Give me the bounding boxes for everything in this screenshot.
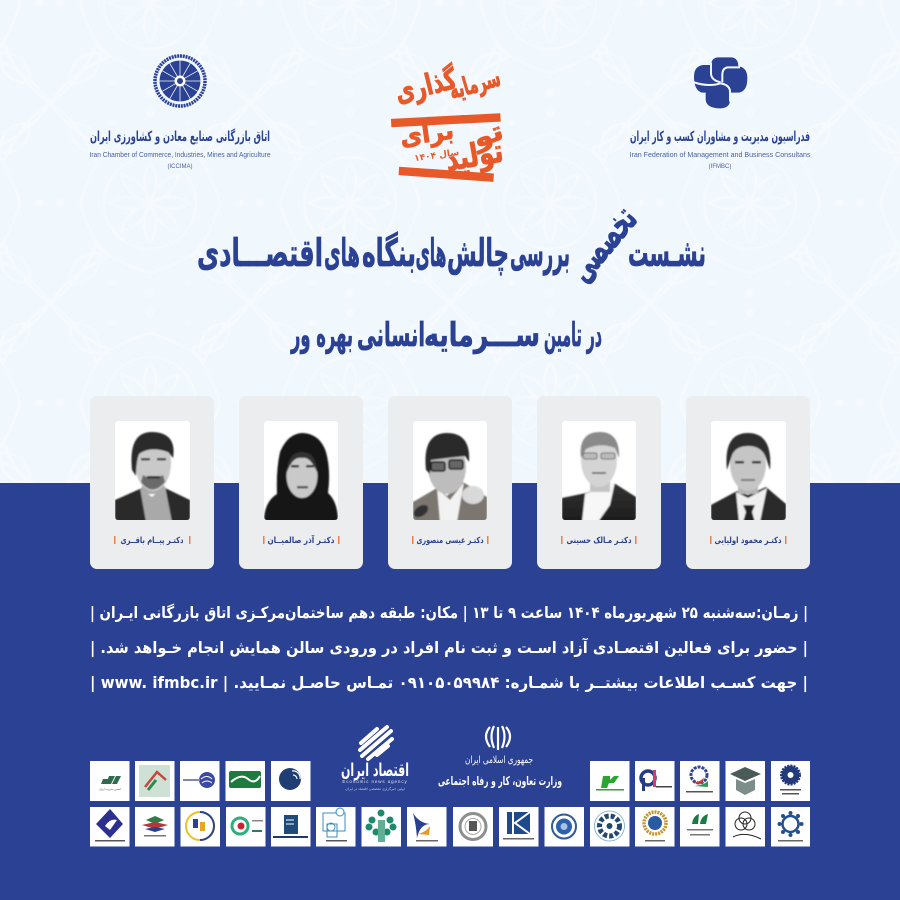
campaign slogan calligraphy — [388, 61, 507, 196]
title line 1: نشـست — [628, 231, 706, 275]
icon: striped globe — [360, 727, 392, 759]
tile: green arrow logo — [590, 761, 630, 801]
name 1 right bar — [189, 536, 190, 544]
portrait 2 — [264, 421, 338, 522]
slogan word: capital: سرمایه — [446, 63, 504, 106]
name 3 left bar — [412, 536, 414, 544]
slogan word: production: تولید — [442, 131, 506, 179]
chamber Persian name: اتاق بازرگانی صنایع معادن و کشاورزی ایران — [90, 128, 270, 145]
tile: graduation cap logo — [726, 761, 765, 801]
slogan swash lower: ـــ — [398, 120, 498, 196]
event details text — [90, 603, 808, 693]
partner logos row 2 — [90, 807, 810, 846]
name 2 right bar — [338, 536, 340, 544]
federation abbreviation: (IFMBC) — [709, 164, 731, 170]
main title — [197, 197, 706, 355]
slogan swash: ـــ — [388, 66, 502, 142]
tile: blue dotted ring — [771, 807, 810, 846]
title line 2: ســـرمایه — [424, 315, 540, 355]
portrait 5 — [711, 421, 786, 522]
tile: green leaves — [680, 807, 720, 846]
title line 1 — [197, 197, 706, 290]
icon: federation emblem — [693, 57, 747, 108]
name 5 left bar — [710, 536, 712, 544]
logo: Economic news agency — [341, 727, 409, 791]
tile: blue globe circle — [180, 761, 220, 801]
speaker card 3: Isa Mansouri — [388, 396, 512, 569]
portrait 3 — [412, 421, 487, 522]
name 3 right bar — [487, 536, 488, 544]
name 4 right bar — [635, 536, 636, 544]
name 2: دکتـر آذر صالمیــان — [268, 534, 335, 546]
tile: house chart logo — [135, 761, 174, 801]
name 4 left bar — [561, 536, 562, 544]
name 5: دکتـر محمود اولیایی — [714, 536, 782, 546]
agency English name: Economic news agency — [342, 779, 408, 784]
tile: green circle with red flower — [226, 807, 266, 846]
tile: development association logo — [680, 761, 720, 801]
tile: green NCR logo — [90, 761, 130, 801]
partner logos row 1 right — [590, 761, 810, 801]
icon: Iran emblem — [486, 726, 510, 750]
federation English name: Iran Federation of Management and Business Consultans — [630, 150, 811, 159]
title line 2: بهره ور — [290, 315, 353, 355]
title line 2: انسانی — [357, 315, 425, 354]
tile: chamber emblem — [771, 761, 810, 801]
name 1 left bar — [114, 536, 116, 544]
tile: gold and blue medallion — [635, 807, 674, 846]
title line 1: اقتصـــادی — [197, 231, 323, 275]
detail line: attendance: | حضور برای فعالین اقتصـادی آزاد اسـت و ثبت نام افراد در ورودی سالن همایش انجام خـواهد شد. | — [90, 637, 808, 658]
speaker card 4: Malek Hosseini — [537, 396, 661, 569]
chamber abbreviation: (ICCIMA) — [168, 164, 192, 170]
patterned light background — [0, 0, 900, 484]
chamber English name: Iran Chamber of Commerce, Industries, Mines and Agriculture — [90, 150, 270, 159]
title line 1: تخصصی — [558, 197, 646, 290]
logo: Iran Federation of Management and Business Consultants — [630, 57, 811, 170]
tile: blue cog with ring — [590, 807, 630, 846]
tile: black line knot — [726, 807, 765, 846]
portrait 4 — [562, 421, 636, 522]
title line 1: چالش — [447, 231, 509, 275]
detail line: time and place: | زمـان:سه‌شنبه ۲۵ شهریورماه ۱۴۰۴ ساعت ۹ تا ۱۳ | مکان: طبقه دهم ساختمان‌مرکـزی اتاق بازرگانی ایـران | — [90, 603, 808, 623]
name 4: دکتـر مـالک حسینی — [566, 536, 632, 546]
slogan word: for: برای — [398, 115, 456, 153]
tile: layered colours — [135, 807, 174, 846]
slogan word: investment: گذاری — [391, 61, 460, 109]
tile: green banner — [226, 761, 265, 801]
logo: Iran Chamber of Commerce — [90, 56, 270, 170]
title line 1: بررسی — [510, 231, 570, 275]
logo: Ministry of Cooperatives, Labour and Social Welfare — [438, 726, 562, 789]
tile: blue columns — [271, 807, 310, 846]
partner logos row 1 left — [90, 761, 310, 801]
tile: blue P logo — [635, 761, 674, 801]
name 3: دکتـر عیسی منصوری — [416, 536, 484, 546]
agency Persian name: اقتصاد ایران — [341, 760, 409, 781]
tile: connected squares — [316, 807, 356, 846]
tile: blue diamond — [90, 807, 130, 846]
slogan year: سال ۱۴۰۴ — [414, 148, 460, 164]
tile: blue orange swoosh — [407, 807, 446, 846]
main title: در تامین — [544, 315, 602, 355]
tile: green NCR logo: انجمن مدیریت ایران — [99, 788, 121, 791]
speaker card 5: Mahmoud Owliaei — [686, 396, 810, 569]
tile: green ornament — [362, 807, 401, 846]
slogan word stack: to: تو — [467, 116, 507, 155]
title line 1: بنگاه — [362, 231, 416, 275]
icon: chamber emblem — [155, 56, 205, 106]
agency tagline: اولین خبرگزاری تخصصی اقتصاد در ایران — [345, 786, 405, 791]
tile: blue gear — [544, 807, 584, 846]
speaker card 1: Payam Bagheri — [90, 396, 214, 569]
ministry republic line: جمهوری اسلامی ایران — [465, 755, 533, 766]
name 5 right bar — [785, 536, 786, 544]
tile: grey seal — [453, 807, 493, 846]
title line 1: های — [324, 231, 360, 275]
title line 1: های — [416, 231, 446, 275]
detail line: contact: | جهت کسـب اطلاعات بیشتــر با شمـاره: ۰۹۱۰۵۰۵۹۹۸۴ تمـاس حاصـل نمـایید. | www. ifmbc.ir | — [90, 673, 808, 693]
ministry name line: وزارت تعاون، کار و رفاه اجتماعی — [438, 774, 562, 789]
blue lower band — [0, 483, 900, 900]
tile: yellow ring — [180, 807, 220, 846]
portrait 1 — [115, 421, 190, 522]
title line 2 — [290, 315, 602, 355]
name 1: دکتـر پیــام باقــری — [120, 536, 184, 546]
tile: dark blue sphere — [271, 761, 310, 801]
speaker card 2: Azar Salemian — [239, 396, 363, 569]
name 2 left bar — [263, 536, 264, 544]
tile: blue K logo — [499, 807, 538, 846]
